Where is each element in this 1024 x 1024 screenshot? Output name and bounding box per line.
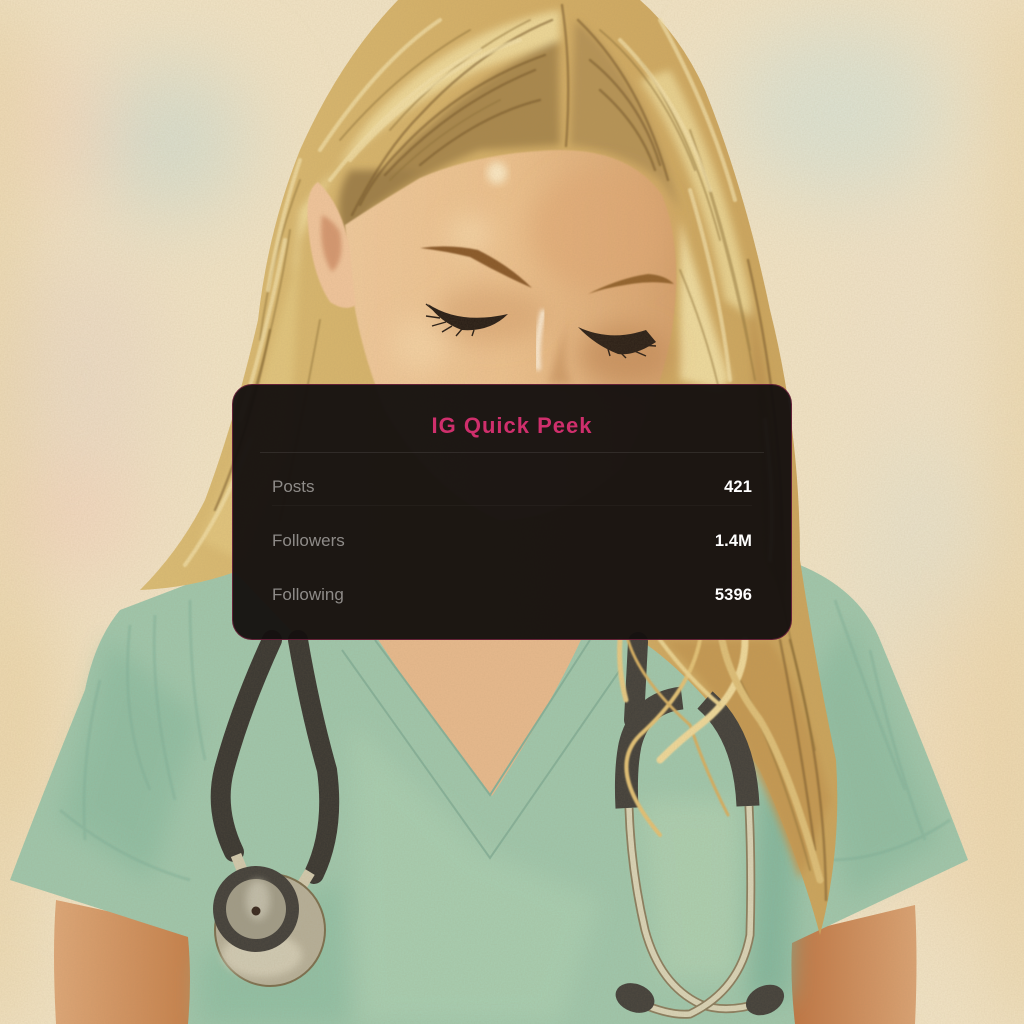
eye left <box>426 304 508 336</box>
stat row: following: 5396 <box>715 586 752 604</box>
arm: right <box>782 905 916 1024</box>
stat row: following: Following <box>272 585 344 604</box>
stats panel <box>232 384 792 640</box>
stat row: followers <box>272 531 752 550</box>
panel title: IG Quick Peek <box>432 413 592 438</box>
scrubs collar <box>342 640 620 858</box>
arm: left <box>54 900 195 1024</box>
stethoscope right tubes <box>626 642 760 1014</box>
eyebrow right <box>588 274 674 294</box>
stat row: posts <box>272 477 752 496</box>
nose highlight <box>538 312 543 368</box>
ear <box>307 182 356 308</box>
neck and V-neck skin <box>372 620 590 796</box>
hair: main mass <box>140 0 837 935</box>
stethoscope chest piece <box>213 855 325 986</box>
eyebrow left <box>420 246 532 288</box>
stat row: following <box>272 585 752 604</box>
stat row: posts: Posts <box>272 477 315 496</box>
stat row: followers: 1.4M <box>715 532 752 550</box>
stethoscope left tube <box>221 640 329 874</box>
eye right <box>578 327 656 358</box>
stat row: followers: Followers <box>272 531 345 550</box>
forehead highlight <box>487 162 507 184</box>
stat row: posts: 421 <box>724 478 752 496</box>
nose shadow <box>548 320 572 384</box>
stethoscope ear tips <box>611 978 789 1021</box>
scrubs top <box>10 565 968 1024</box>
loose hair strands over stethoscope <box>620 640 820 880</box>
face <box>307 150 676 520</box>
